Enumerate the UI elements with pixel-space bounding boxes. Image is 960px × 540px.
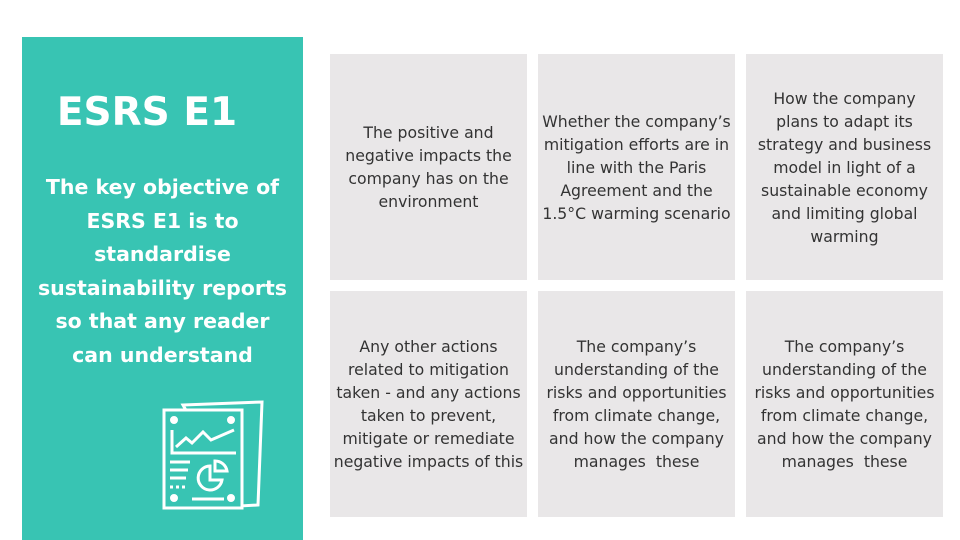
card 4: Any other actions related to mitigation taken - and any actions taken to prevent, mitigate or remediate negative impacts of this bbox=[334, 337, 523, 471]
card 4 bbox=[330, 291, 527, 517]
card 5: The company’s understanding of the risks and opportunities from climate change, and how the company manages these bbox=[546, 337, 726, 471]
card 6 bbox=[746, 291, 943, 517]
card 1 bbox=[330, 54, 527, 280]
panel: left teal bbox=[22, 37, 303, 540]
card 3 bbox=[746, 54, 943, 280]
card 2: Whether the company’s mitigation efforts are in line with the Paris Agreement and the 1.5°C warming scenario bbox=[542, 112, 731, 222]
subtitle text: The key objective of ESRS E1 is to standardise sustainability reports so that any reader can understand bbox=[38, 175, 287, 367]
icon: report documents bbox=[162, 400, 264, 510]
title: ESRS E1 bbox=[57, 90, 237, 135]
card 3: How the company plans to adapt its strategy and business model in light of a sustainable economy and limiting global warming bbox=[758, 88, 931, 246]
card 6: The company’s understanding of the risks and opportunities from climate change, and how the company manages these bbox=[754, 337, 934, 471]
card 1: The positive and negative impacts the company has on the environment bbox=[345, 123, 512, 211]
card 5 bbox=[538, 291, 735, 517]
card 2 bbox=[538, 54, 735, 280]
